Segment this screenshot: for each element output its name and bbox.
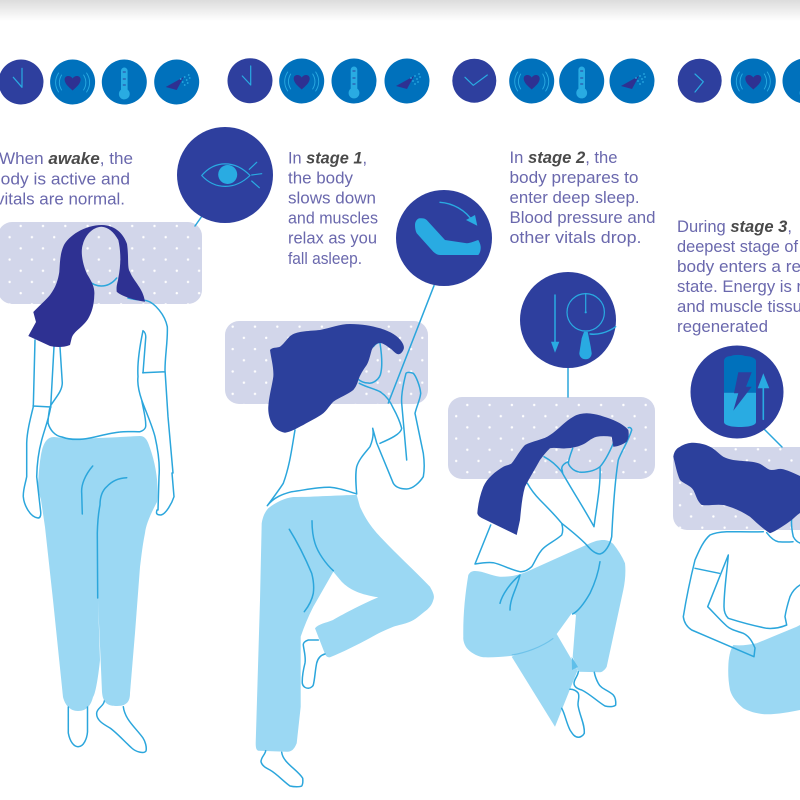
- text: stage 2: [510, 149, 656, 247]
- fold line: [512, 638, 553, 655]
- text: stage 3: During stage 3,: [677, 218, 792, 236]
- icon: heart rate: [509, 58, 554, 104]
- callout: eye: [177, 127, 273, 226]
- text: stage 2: enter deep sleep.: [510, 189, 640, 207]
- back leg: [512, 634, 578, 727]
- pants: [38, 436, 158, 711]
- icon: down arrow arc: [440, 202, 477, 226]
- overlap shade: [572, 657, 578, 670]
- text: stage 1: [288, 150, 378, 268]
- text: stage 2: In stage 2, the: [510, 149, 618, 167]
- text: stage 3: and muscle tissu: [677, 298, 800, 316]
- pillow: [673, 447, 800, 530]
- pillow: [0, 222, 202, 304]
- text: stage 3: state. Energy is r: [677, 278, 800, 296]
- text: stage 1: In stage 1,: [288, 150, 367, 168]
- pants: [728, 625, 800, 714]
- connector: [195, 216, 202, 226]
- text: stage 2: Blood pressure and: [510, 209, 656, 227]
- icon: clock: [452, 59, 496, 103]
- body outline: [267, 343, 424, 612]
- icon: heart rate: [50, 60, 95, 104]
- figure: stage 3: [673, 428, 800, 714]
- hair: [268, 324, 404, 433]
- icon: breathing: [384, 58, 430, 104]
- icon: thermometer: [102, 60, 147, 104]
- connector: [567, 367, 569, 397]
- circle: [520, 272, 616, 368]
- icon: thermometer: [332, 58, 376, 104]
- text: stage 3: regenerated: [677, 318, 768, 336]
- icon: gauge: [567, 294, 616, 359]
- text: stage 1: and muscles: [288, 210, 378, 228]
- body outline: [475, 427, 632, 614]
- feet: [562, 672, 616, 737]
- hair: [477, 413, 629, 535]
- figure: stage 2: [448, 367, 655, 737]
- pillow: [448, 397, 655, 479]
- body outline: [23, 278, 174, 598]
- figure: awake: [0, 222, 202, 752]
- icon: arm relaxing: [415, 218, 481, 255]
- icon: thermometer: [782, 58, 800, 104]
- pillow: [225, 321, 428, 404]
- connector: [388, 286, 434, 403]
- text: awake: [0, 150, 133, 208]
- text: stage 3: deepest stage of: [677, 238, 798, 256]
- text: stage 2: other vitals drop.: [510, 229, 642, 247]
- text: stage 1: the body: [288, 170, 354, 188]
- icon: up arrow: [758, 373, 769, 419]
- feet: [261, 640, 325, 787]
- feet: [68, 701, 146, 752]
- icon: battery: [724, 355, 756, 427]
- text: stage 1: fall asleep.: [288, 250, 362, 268]
- top shadow band: [0, 0, 800, 21]
- text: stage 3: body enters a re: [677, 258, 800, 276]
- icon: heart rate: [731, 58, 776, 104]
- icon: heart rate: [279, 58, 324, 104]
- text: stage 1: slows down: [288, 190, 376, 208]
- pants: [256, 495, 434, 752]
- icon: breathing: [154, 60, 199, 104]
- text: stage 2: body prepares to: [510, 169, 638, 187]
- callout: blood pressure: [520, 272, 616, 368]
- icon: eye: [202, 162, 262, 188]
- icon: clock: [228, 58, 272, 103]
- text: awake: When awake, the: [0, 150, 133, 168]
- text: stage 1: relax as you: [288, 230, 377, 248]
- icon: thermometer: [559, 58, 604, 104]
- hair: [28, 225, 145, 347]
- icon row: awake vitals: [0, 60, 199, 104]
- icon: down arrow: [551, 295, 559, 353]
- circle: [177, 127, 273, 223]
- circle: [396, 190, 492, 286]
- circle: [690, 346, 784, 438]
- icon row: stage 2 vitals: [452, 58, 654, 104]
- figure: stage 1: [225, 286, 434, 787]
- hair: [673, 443, 800, 533]
- callout: battery: [690, 346, 784, 438]
- connector: [763, 428, 782, 447]
- icon row: stage 1 vitals: [228, 58, 430, 104]
- icon: breathing: [610, 58, 654, 104]
- icon row: stage 3 vitals: [678, 58, 800, 104]
- body outline: [683, 518, 800, 657]
- icon: clock: [0, 60, 44, 104]
- text: stage 3: [677, 218, 800, 336]
- pants: [463, 540, 625, 672]
- callout: arm: [396, 190, 492, 286]
- icon: clock: [678, 59, 722, 103]
